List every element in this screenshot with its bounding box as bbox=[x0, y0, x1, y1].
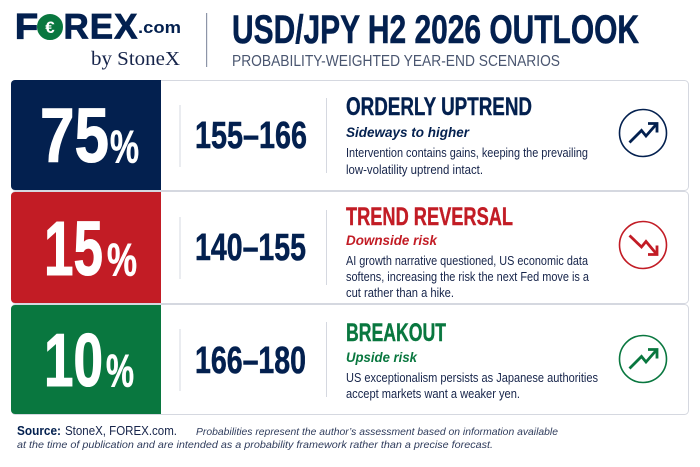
description bbox=[346, 371, 598, 401]
description: softens, increasing the risk the next Fed move is a bbox=[346, 270, 589, 284]
range: 155–166: 155–166 bbox=[195, 115, 307, 157]
probability block: 75%: % bbox=[110, 120, 139, 172]
probability block: 15% bbox=[11, 192, 161, 303]
panel: trend reversal bbox=[11, 192, 688, 304]
description: low-volatility uptrend intact. bbox=[346, 163, 483, 177]
footer: source and disclaimer: Probabilities represent the author’s assessment based on information available bbox=[196, 426, 558, 438]
logo: FOREX.com by StoneX: € bbox=[45, 18, 55, 37]
icon: trend down bbox=[620, 222, 666, 268]
range: 140–155: 140–155 bbox=[195, 227, 306, 269]
subheading: downside risk: Downside risk bbox=[346, 232, 438, 248]
footer: source and disclaimer: StoneX, FOREX.com. bbox=[65, 424, 177, 438]
footer: source and disclaimer bbox=[17, 424, 558, 451]
panel: breakout bbox=[11, 304, 688, 414]
footer: source and disclaimer: Source: bbox=[17, 424, 61, 438]
subheading: upside risk: Upside risk bbox=[346, 349, 418, 365]
logo: FOREX.com by StoneX bbox=[15, 8, 181, 70]
probability block: 75% bbox=[11, 80, 161, 190]
probability block: 15%: 15 bbox=[44, 206, 103, 292]
logo: FOREX.com by StoneX: by StoneX bbox=[91, 48, 181, 70]
probability block: 10%: 10 bbox=[44, 318, 103, 402]
probability block: 15%: % bbox=[107, 234, 137, 286]
description: Intervention contains gains, keeping the prevailing bbox=[346, 146, 588, 160]
description bbox=[346, 146, 588, 177]
logo: FOREX.com by StoneX: .com bbox=[138, 18, 181, 37]
description bbox=[346, 254, 589, 300]
probability block: 75%: 75 bbox=[40, 93, 109, 179]
description: US exceptionalism persists as Japanese authorities bbox=[346, 371, 598, 385]
heading: trend reversal: TREND REVERSAL bbox=[346, 203, 513, 231]
logo: FOREX.com by StoneX: F bbox=[15, 8, 38, 46]
subtitle: PROBABILITY-WEIGHTED YEAR-END SCENARIOS bbox=[232, 53, 560, 70]
description: accept markets want a weaker yen. bbox=[346, 387, 520, 401]
probability block: 10% bbox=[11, 305, 161, 414]
description: AI growth narrative questioned, US economic data bbox=[346, 254, 588, 268]
heading: orderly uptrend: ORDERLY UPTREND bbox=[346, 93, 532, 121]
heading: breakout: BREAKOUT bbox=[346, 319, 446, 347]
logo: FOREX.com by StoneX: REX bbox=[64, 8, 138, 46]
footer: source and disclaimer: at the time of publication and are intended as a probability framework rather than a precise forecast. bbox=[17, 439, 493, 451]
subheading: sideways to higher: Sideways to higher bbox=[346, 124, 470, 140]
probability block: 10%: % bbox=[106, 344, 134, 396]
icon: trend up bbox=[620, 110, 666, 156]
range: 166–180: 166–180 bbox=[195, 340, 306, 382]
description: cut rather than a hike. bbox=[346, 286, 454, 300]
icon: trend up bbox=[620, 336, 666, 382]
panel: orderly uptrend bbox=[11, 80, 688, 190]
